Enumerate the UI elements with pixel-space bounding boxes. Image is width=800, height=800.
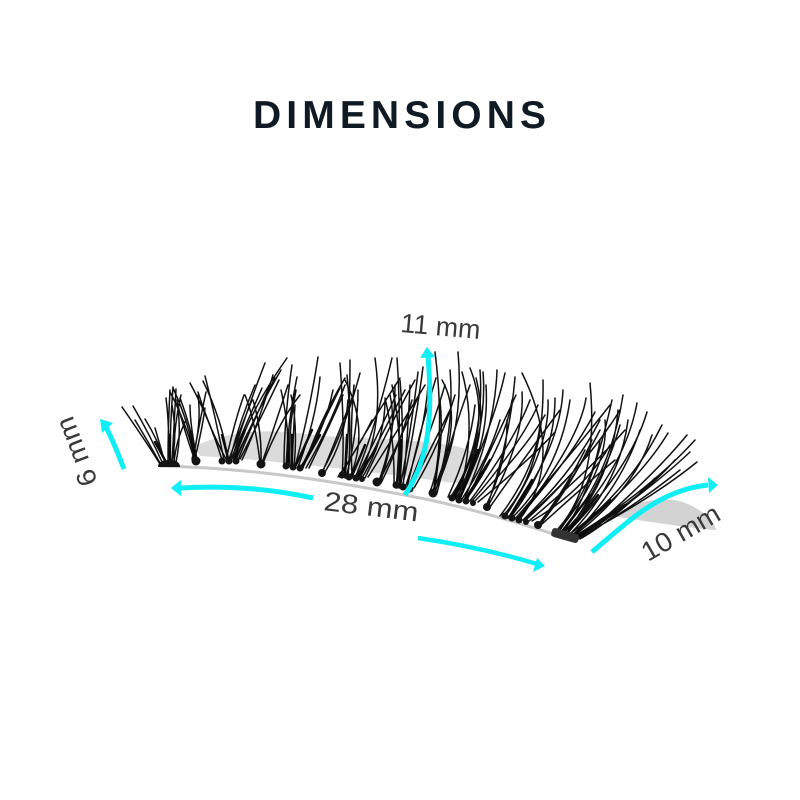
arrow: 28 mm right: [418, 538, 545, 572]
lash hairs: right clusters: [448, 368, 697, 539]
title: DIMENSIONS: [253, 94, 546, 137]
label: 11 mm: 11 mm: [399, 308, 482, 345]
lash band: [160, 466, 575, 541]
arrow: 10 mm: [592, 477, 718, 552]
arrow: 28 mm left: [171, 480, 313, 498]
lash shadow: [195, 431, 716, 530]
label: 10 mm: 10 mm: [636, 498, 725, 567]
lash knots: [158, 456, 580, 544]
label: 6 mm: 6 mm: [50, 413, 104, 491]
label: 28 mm: 28 mm: [322, 486, 420, 528]
thicker hair bases: [155, 430, 625, 537]
lash hairs: left clusters: [122, 352, 470, 494]
arrow: 6 mm: [100, 419, 124, 469]
arrow: 11 mm: [405, 347, 435, 495]
eyelash strip illustration: [122, 352, 716, 544]
